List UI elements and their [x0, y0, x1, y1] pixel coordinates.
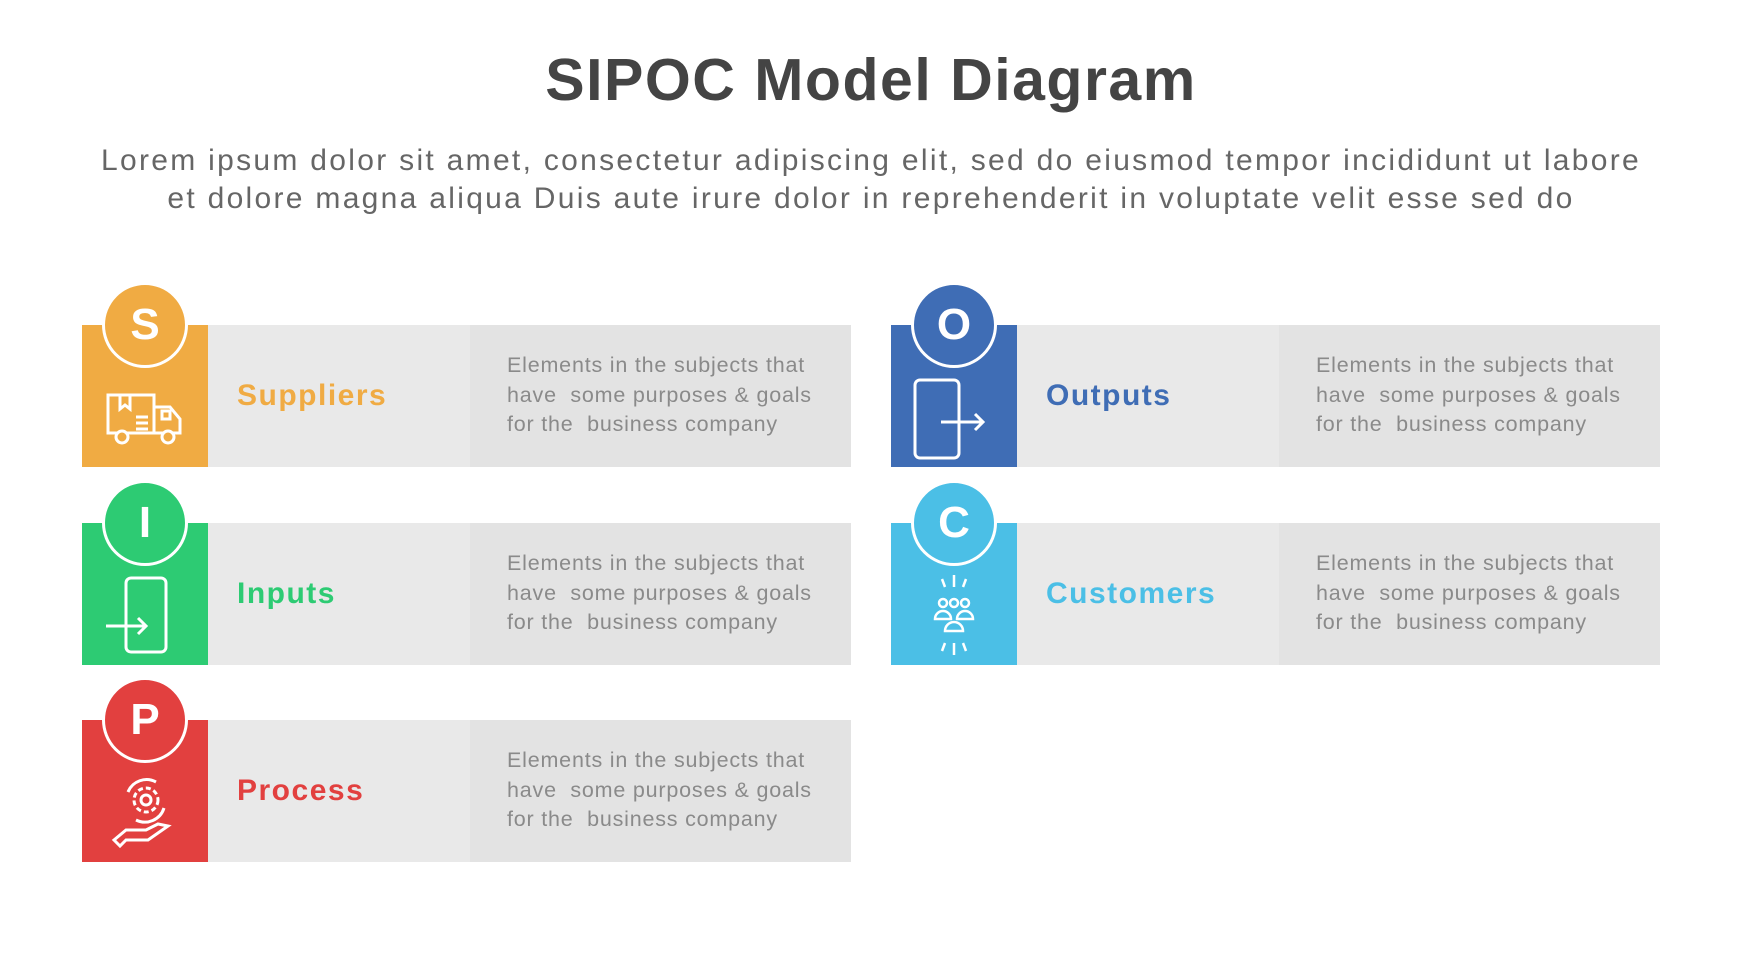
icon: output: [914, 378, 985, 460]
subtitle: [101, 144, 1641, 215]
icon: input: [106, 576, 168, 654]
panel: inputs: Inputs: [237, 577, 336, 610]
panel: outputs: Elements in the subjects that have some purposes & goals for the business company: [1316, 353, 1621, 436]
subtitle: et dolore magna aliqua Duis aute irure dolor in reprehenderit in voluptate velit esse sed do: [167, 182, 1575, 215]
panel: customers: [891, 523, 1660, 665]
title: SIPOC Model Diagram: [545, 47, 1197, 113]
icon: gear hand: [112, 778, 172, 848]
text: C: [938, 498, 970, 547]
panel: inputs: [82, 523, 851, 665]
panel: customers: Elements in the subjects that have some purposes & goals for the business company: [1316, 551, 1621, 634]
panel: process: Process: [237, 774, 364, 807]
subtitle: Lorem ipsum dolor sit amet, consectetur adipiscing elit, sed do eiusmod tempor incididunt ut labore: [101, 144, 1641, 177]
text: P: [130, 695, 160, 744]
text: S: [130, 300, 160, 349]
panel: process: Elements in the subjects that have some purposes & goals for the business company: [507, 748, 812, 831]
panel: outputs: [891, 325, 1660, 467]
description: Elements in the subjects that have some purposes & goals for the business company: [507, 353, 812, 436]
panel: customers: Customers: [1046, 577, 1216, 610]
icon: truck: [106, 394, 182, 444]
panel: inputs: Elements in the subjects that have some purposes & goals for the business company: [507, 551, 812, 634]
text: O: [937, 300, 971, 349]
panel: process: [82, 720, 851, 862]
icon: people: [934, 575, 974, 655]
text: I: [139, 498, 151, 547]
panel: outputs: Outputs: [1046, 379, 1171, 412]
panel: suppliers: [82, 325, 851, 467]
label: Suppliers: [237, 379, 387, 412]
